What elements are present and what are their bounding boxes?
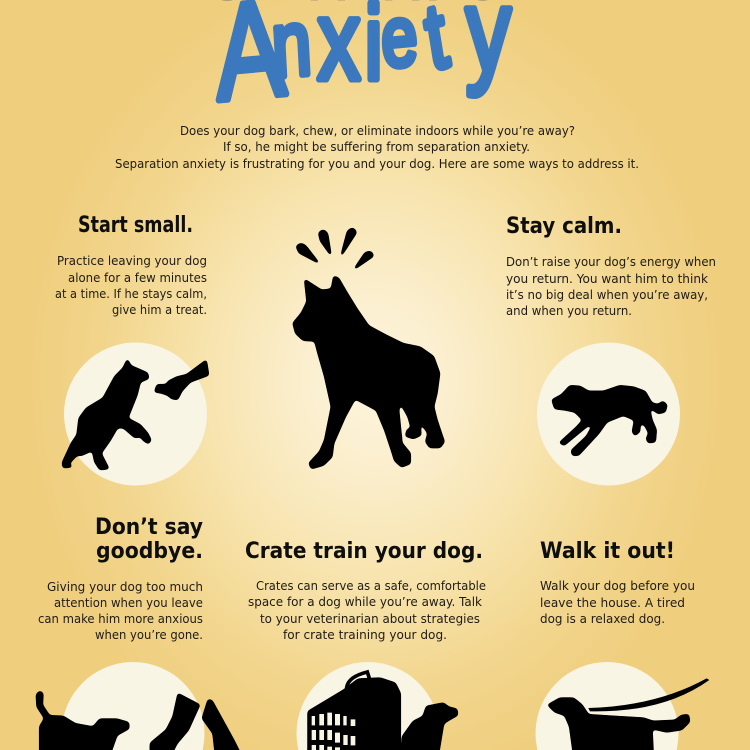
icon: crouching dog [537, 342, 680, 486]
text: start small [55, 254, 207, 317]
text: walk it out: Walk your dog before you [540, 579, 695, 593]
text: crate train: Crates can serve as a safe, comfortable [256, 579, 486, 593]
text: start small: give him a treat. [112, 303, 207, 317]
intro text [115, 124, 639, 171]
text: crate train: to your veterinarian about strategies [260, 612, 480, 626]
heading: don't say goodbye [95, 515, 203, 564]
text: stay calm: you return. You want him to think [506, 272, 708, 286]
icon: dog on leash [536, 662, 709, 750]
panel: stay calm [506, 214, 716, 486]
text: walk it out: dog is a relaxed dog. [540, 612, 665, 626]
text: don't say goodbye: when you’re gone. [95, 628, 203, 642]
heading: start small: Start small. [78, 213, 193, 238]
text: start small: alone for a few minutes [68, 271, 207, 285]
text: crate train: space for a dog while you’re away. Talk [248, 595, 482, 609]
icon: dog and owner's legs [37, 662, 245, 750]
text: start small: at a time. If he stays calm, [55, 287, 207, 301]
text: crate train [248, 579, 486, 642]
text: walk it out [540, 579, 695, 626]
heading: walk it out: Walk it out! [540, 539, 675, 564]
heading: don't say goodbye: goodbye. [96, 539, 203, 564]
heading: crate train: Crate train your dog. [245, 539, 483, 564]
icon: crate and dog [296, 662, 457, 750]
text: walk it out: leave the house. A tired [540, 596, 685, 610]
title [210, 0, 540, 129]
text: stay calm [506, 255, 716, 318]
text: don't say goodbye [38, 580, 203, 642]
intro text: If so, he might be suffering from separation anxiety. [223, 140, 530, 154]
text: don't say goodbye: attention when you leave [54, 596, 203, 610]
intro text: Does your dog bark, chew, or eliminate indoors while you’re away? [180, 124, 575, 138]
text: stay calm: it’s no big deal when you’re away, [506, 288, 708, 302]
text: don't say goodbye: can make him more anxious [38, 612, 203, 626]
text: crate train: for crate training your dog. [283, 628, 447, 642]
text: stay calm: and when you return. [506, 304, 632, 318]
panel: crate train [245, 539, 486, 750]
panel: start small [55, 213, 208, 486]
intro text: Separation anxiety is frustrating for you and your dog. Here are some ways to address it. [115, 157, 639, 171]
icon: alert dog with barking marks [293, 229, 444, 468]
panel: don't say goodbye [37, 515, 245, 750]
panel: walk it out [536, 539, 709, 750]
heading: stay calm: Stay calm. [506, 214, 622, 239]
text: stay calm: Don’t raise your dog’s energy when [506, 255, 716, 269]
text: start small: Practice leaving your dog [57, 254, 207, 268]
heading: don't say goodbye: Don’t say [95, 515, 203, 540]
icon: dog reaching for treat [63, 342, 208, 486]
text: don't say goodbye: Giving your dog too much [47, 580, 203, 594]
